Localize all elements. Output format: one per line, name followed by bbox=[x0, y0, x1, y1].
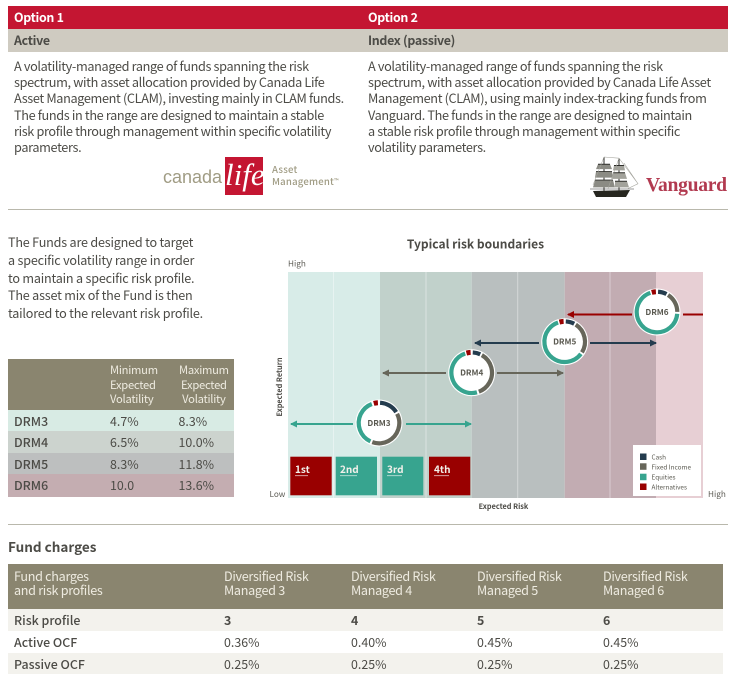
row: DRM3: DRM3 bbox=[14, 412, 48, 430]
donut: DRM4: DRM4 bbox=[460, 367, 483, 379]
donut: DRM6: DRM6 bbox=[645, 306, 669, 318]
table header: Diversified Risk bbox=[224, 566, 308, 584]
legend: Fixed Income bbox=[652, 462, 691, 472]
heading: option 2: Option 2 bbox=[368, 8, 418, 26]
row: risk profile: Risk profile bbox=[14, 611, 80, 629]
row: active OCF: Active OCF bbox=[14, 632, 77, 650]
legend: Equities bbox=[652, 473, 676, 482]
donut: DRM3 bbox=[352, 396, 406, 450]
quartile box: 4th bbox=[429, 457, 470, 495]
panel: option 2 index bbox=[368, 6, 728, 197]
row: risk profile: 5 bbox=[477, 611, 484, 629]
table header: Managed 5 bbox=[477, 580, 538, 599]
text block: index description: spectrum, with asset allocation provided by Canada Life Asset bbox=[368, 72, 711, 91]
heading: fund charges: Fund charges bbox=[8, 536, 96, 556]
row: DRM5: 11.8% bbox=[178, 454, 214, 472]
table header: Diversified Risk bbox=[603, 566, 687, 584]
table header: Diversified Risk bbox=[477, 566, 561, 584]
row: DRM4: DRM4 bbox=[14, 433, 48, 451]
row: active OCF: 0.45% bbox=[603, 632, 638, 650]
table header: Managed 3 bbox=[224, 580, 285, 599]
icon: sailing ship bbox=[590, 156, 638, 197]
chart: typical risk boundaries bbox=[270, 236, 726, 512]
legend bbox=[633, 445, 701, 496]
legend: Alternatives bbox=[652, 483, 687, 492]
row: DRM3 bbox=[8, 410, 234, 431]
text block: index description bbox=[368, 56, 711, 156]
table header: Managed 6 bbox=[603, 580, 664, 599]
table header: Managed 4 bbox=[351, 580, 412, 599]
quartile box: 2nd: 2nd bbox=[340, 461, 359, 476]
row: risk profile: 6 bbox=[603, 611, 610, 629]
header: minimum expected volatility bbox=[110, 362, 158, 407]
row: DRM6: DRM6 bbox=[14, 476, 48, 494]
text block: index description: Vanguard. The funds in the range are designed to maintain bbox=[368, 105, 692, 124]
axis label: high risk: High bbox=[708, 488, 726, 500]
heading: option 2 bbox=[368, 6, 728, 28]
logo text: asset management: Asset bbox=[272, 162, 298, 176]
logo wordmark: canada: canada bbox=[163, 166, 222, 186]
text block: active description: A volatility-managed range of funds spanning the risk bbox=[14, 56, 309, 74]
donut: DRM5: DRM5 bbox=[553, 336, 576, 348]
header: minimum expected volatility: Volatility bbox=[110, 391, 153, 407]
logo text: asset management: Management™ bbox=[272, 174, 339, 188]
quartile box: 4th: 4th bbox=[434, 461, 451, 476]
row: active OCF: 0.40% bbox=[351, 632, 386, 650]
arrow: DRM3 range bbox=[291, 423, 471, 425]
row: DRM4 bbox=[8, 431, 234, 452]
row: DRM4: 10.0% bbox=[178, 433, 214, 451]
axis label: low risk: Low bbox=[270, 488, 286, 500]
table header bbox=[8, 564, 723, 608]
row: risk profile: 4 bbox=[351, 611, 358, 629]
axis title: expected risk: Expected Risk bbox=[479, 502, 529, 512]
row: DRM6 bbox=[8, 474, 234, 496]
header: maximum expected volatility bbox=[179, 362, 229, 407]
quartile box: 2nd bbox=[336, 457, 377, 495]
quartile box: 1st bbox=[290, 457, 332, 495]
donut: DRM6 bbox=[629, 284, 685, 340]
table: expected volatility bbox=[8, 359, 234, 497]
arrow: DRM6 range bbox=[568, 314, 703, 316]
row: passive OCF: 0.25% bbox=[477, 654, 512, 672]
donut: DRM4 bbox=[444, 345, 499, 400]
text block: volatility intro: The Funds are designed to target bbox=[8, 232, 193, 251]
text block: active description: spectrum, with asset allocation provided by Canada Life bbox=[14, 72, 324, 91]
quartile box: 1st: 1st bbox=[295, 461, 311, 476]
text block: volatility intro: The asset mix of the Fund is then bbox=[8, 285, 193, 304]
row: DRM3: 8.3% bbox=[178, 412, 207, 430]
row: passive OCF: 0.25% bbox=[224, 654, 260, 672]
text block: volatility intro: a specific volatility range in order bbox=[8, 250, 194, 269]
arrow: DRM4 range bbox=[383, 372, 563, 374]
heading: option 1 bbox=[8, 6, 368, 28]
donut: DRM5 bbox=[536, 313, 593, 370]
text block: index description: a stable risk profile through management within specific bbox=[368, 121, 680, 140]
text block: active description: Asset Management (CLAM), investing mainly in CLAM funds. bbox=[14, 88, 344, 107]
axis title: expected return: Expected Return bbox=[275, 357, 285, 417]
row: DRM4: 6.5% bbox=[110, 433, 139, 451]
logo wordmark: vanguard: Vanguard bbox=[646, 175, 727, 196]
row: DRM6: 10.0 bbox=[110, 476, 134, 494]
risk bands bbox=[288, 272, 703, 498]
row: active OCF: 0.45% bbox=[477, 632, 512, 650]
panel: option 1 active bbox=[8, 6, 368, 195]
logo: canada life asset management bbox=[163, 157, 339, 195]
text block: volatility intro: to maintain a specific risk profile. bbox=[8, 268, 194, 287]
legend: Cash bbox=[652, 452, 666, 462]
row: DRM6: 13.6% bbox=[178, 476, 214, 494]
row: passive OCF: Passive OCF bbox=[14, 654, 85, 672]
text block: volatility intro: tailored to the relevant risk profile. bbox=[8, 303, 203, 322]
row: DRM5: DRM5 bbox=[14, 454, 48, 472]
text block: active description: parameters. bbox=[14, 137, 81, 156]
table header bbox=[8, 359, 234, 410]
row: risk profile bbox=[8, 609, 723, 630]
heading: option 1: Option 1 bbox=[14, 8, 64, 26]
text block: active description: The funds in the range are designed to maintain a stable bbox=[14, 105, 324, 124]
text block: index description: A volatility-managed range of funds spanning the risk bbox=[368, 56, 663, 74]
row: DRM3: 4.7% bbox=[110, 412, 139, 430]
quartile box: 3rd: 3rd bbox=[387, 461, 404, 476]
row: risk profile: 3 bbox=[224, 611, 231, 629]
text block: active description: risk profile through management within specific volatility bbox=[14, 121, 331, 140]
subheading: index passive: Index (passive) bbox=[368, 31, 455, 49]
text block: active description bbox=[14, 56, 344, 156]
row: DRM5: 8.3% bbox=[110, 454, 139, 472]
arrow: DRM5 range bbox=[475, 342, 656, 344]
quartile box: 3rd bbox=[382, 457, 423, 495]
header: maximum expected volatility: Expected bbox=[181, 377, 227, 393]
row: DRM5 bbox=[8, 452, 234, 474]
text block: index description: volatility parameters. bbox=[368, 137, 486, 156]
header: minimum expected volatility: Minimum bbox=[110, 362, 158, 378]
row: passive OCF: 0.25% bbox=[351, 654, 386, 672]
chart title: Typical risk boundaries bbox=[407, 236, 544, 252]
axis label: high return: High bbox=[288, 258, 306, 270]
header: maximum expected volatility: Maximum bbox=[179, 362, 229, 378]
row: passive OCF: 0.25% bbox=[603, 654, 638, 672]
row: passive OCF bbox=[8, 652, 723, 674]
row: active OCF: 0.36% bbox=[224, 632, 260, 650]
header: maximum expected volatility: Volatility bbox=[182, 391, 226, 407]
logo: vanguard bbox=[590, 156, 727, 197]
text block: index description: Management (CLAM), using mainly index-tracking funds from bbox=[368, 88, 706, 107]
row: active OCF bbox=[8, 630, 723, 652]
table header: Fund charges bbox=[14, 566, 89, 584]
header: minimum expected volatility: Expected bbox=[110, 377, 156, 393]
table: fund charges and risk profiles bbox=[8, 564, 723, 674]
table header: and risk profiles bbox=[14, 580, 103, 599]
logo text: asset management bbox=[272, 162, 339, 188]
text block: volatility intro bbox=[8, 232, 203, 322]
subheading: active: Active bbox=[14, 31, 50, 49]
subheading: active bbox=[8, 29, 368, 52]
subheading: index passive bbox=[368, 29, 728, 52]
table header: Diversified Risk bbox=[351, 566, 435, 584]
donut: DRM3: DRM3 bbox=[367, 417, 391, 429]
